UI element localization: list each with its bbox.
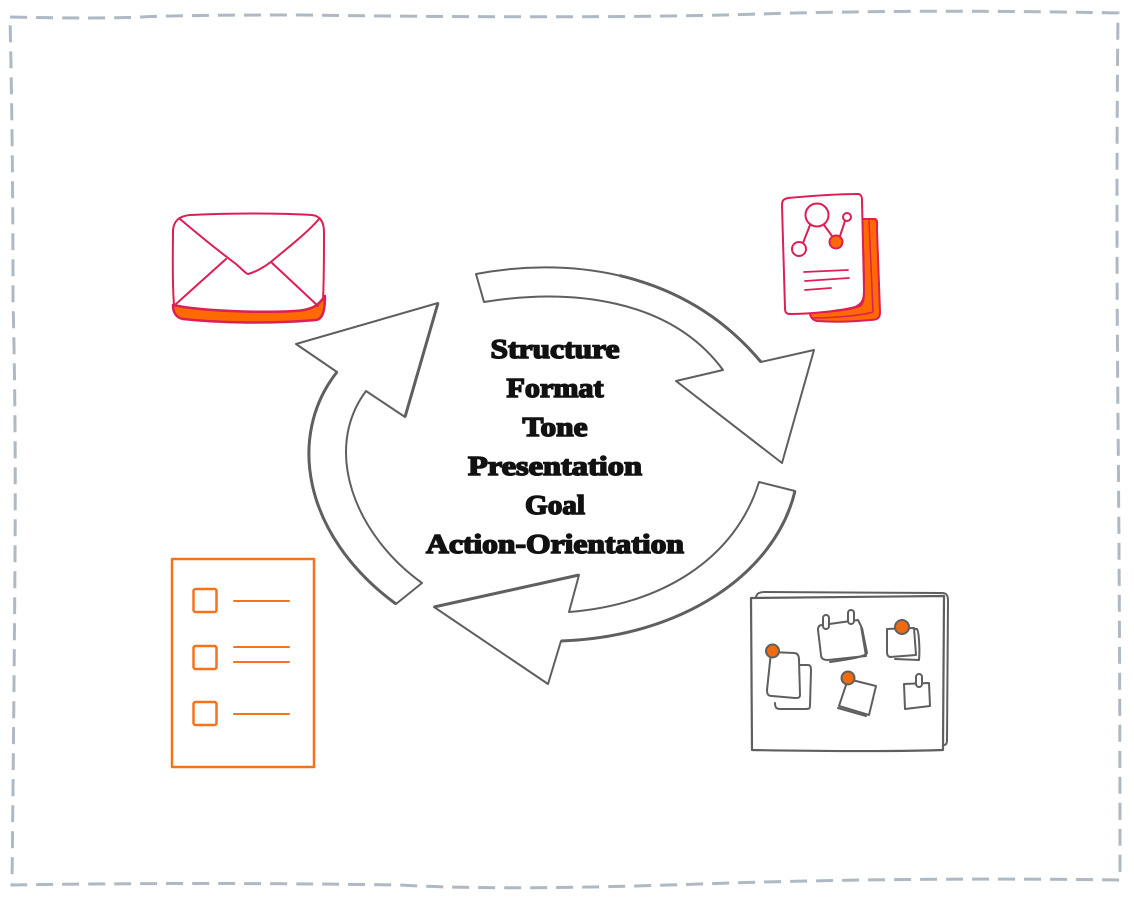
checklist page	[172, 559, 314, 767]
central word list	[426, 334, 684, 559]
envelope orange base	[173, 296, 325, 323]
board back edge	[756, 592, 948, 745]
central word list: Format	[506, 373, 604, 403]
central word list: Action-Orientation	[426, 529, 684, 559]
envelope body	[173, 214, 324, 305]
note top right	[895, 629, 919, 660]
checklist lines	[234, 601, 289, 714]
note with clip	[904, 683, 930, 709]
icon: report with chart	[782, 194, 880, 322]
report text lines	[804, 270, 849, 290]
icon: envelope	[173, 214, 325, 323]
cycle arrow: top right	[476, 267, 814, 463]
central word list: Tone	[522, 412, 588, 442]
calendar note	[818, 620, 866, 660]
envelope flap	[180, 219, 319, 274]
icon: checklist	[172, 559, 314, 767]
icon: pin board	[751, 592, 948, 751]
central word list: Presentation	[468, 451, 642, 481]
checklist boxes	[194, 589, 216, 612]
report page	[782, 194, 864, 314]
board front	[751, 596, 944, 751]
central word list: Structure	[490, 334, 620, 364]
envelope lower folds	[176, 259, 318, 306]
report chart	[806, 204, 828, 226]
cycle arrow: left	[296, 303, 438, 604]
central word list: Goal	[525, 490, 586, 520]
note stack left	[775, 665, 811, 709]
tilted note	[839, 679, 876, 715]
cycle arrow: bottom	[434, 482, 795, 684]
orange pins	[766, 644, 779, 658]
report orange back pages	[810, 219, 880, 322]
